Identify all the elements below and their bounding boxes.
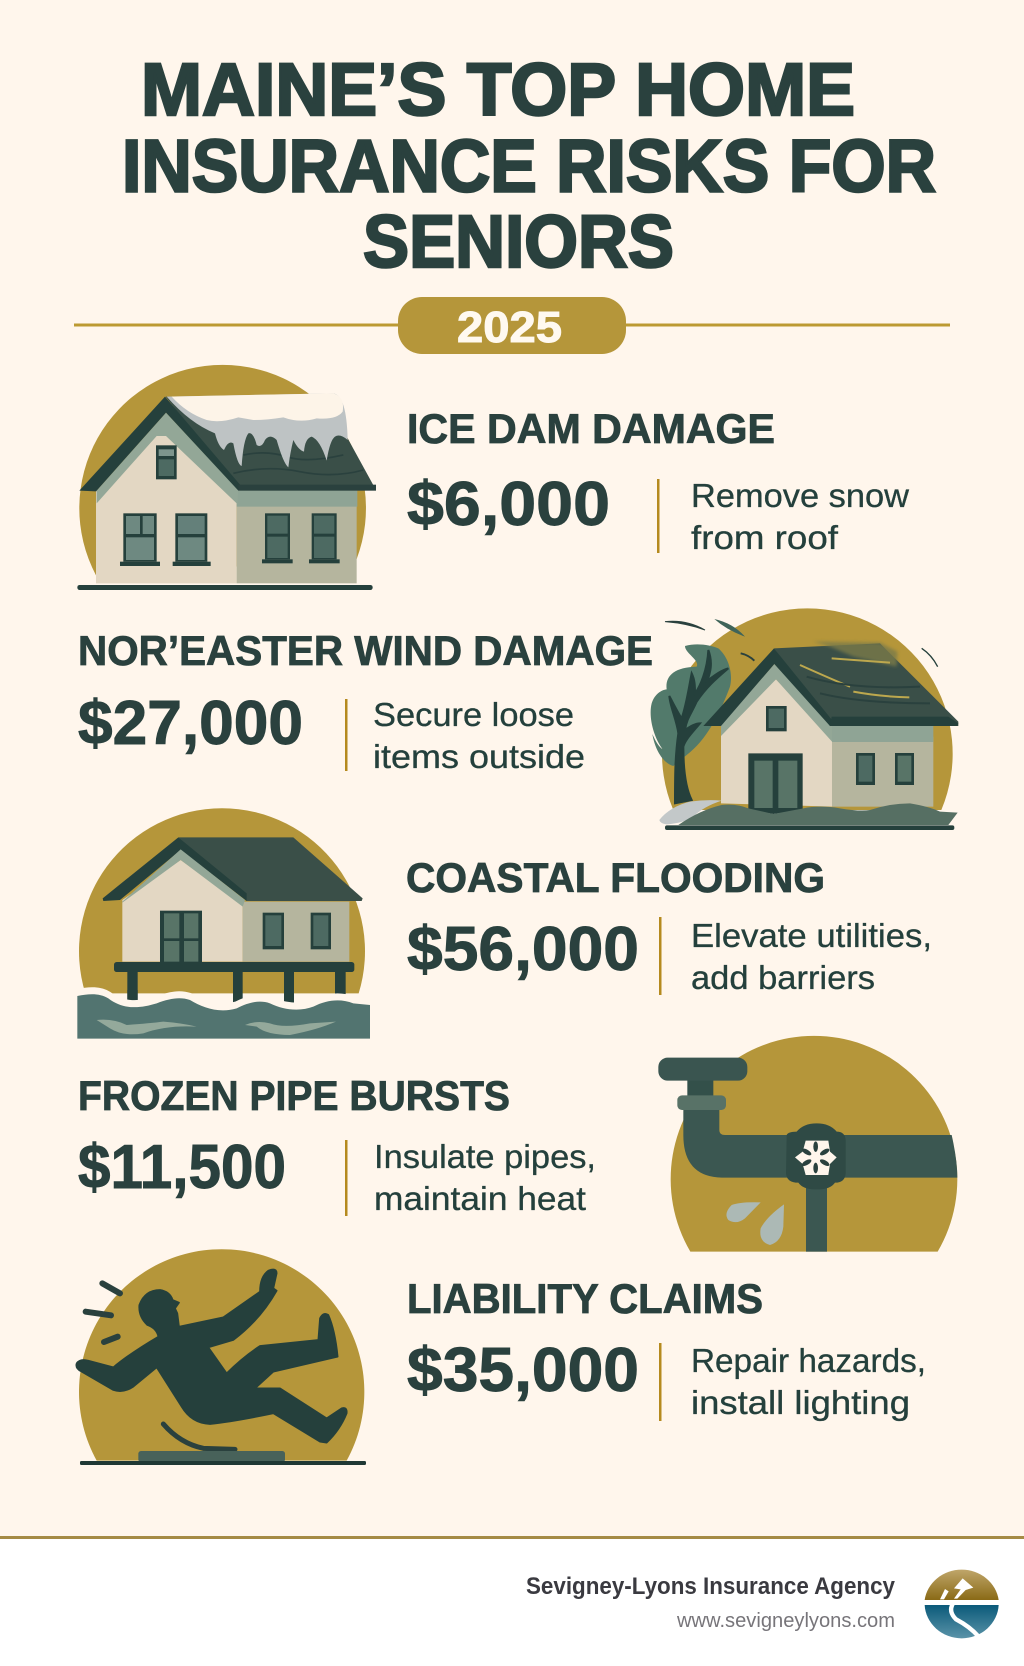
cost: $11,500: $11,500 — [78, 1133, 286, 1202]
heading: ice dam damage: ICE DAM DAMAGE — [407, 405, 775, 452]
title: MAINE’S TOP HOME — [141, 48, 855, 131]
icon: agency logo — [925, 1570, 999, 1638]
year badge with rule: 2025 — [457, 303, 562, 352]
title: INSURANCE RISKS FOR — [122, 124, 936, 208]
heading: coastal flooding: COASTAL FLOODING — [406, 854, 825, 901]
tip: insulate pipes: maintain heat — [374, 1180, 586, 1217]
agency name: Sevigney-Lyons Insurance Agency — [526, 1573, 896, 1600]
heading: frozen pipe bursts: FROZEN PIPE BURSTS — [78, 1072, 510, 1119]
tip: repair hazards: Repair hazards, — [691, 1342, 926, 1379]
panel: nor'easter wind damage — [78, 608, 958, 830]
tip: secure loose items — [373, 696, 585, 775]
year badge with rule — [74, 297, 950, 354]
cost: $56,000: $56,000 — [407, 915, 639, 984]
divider — [659, 917, 662, 995]
panel: frozen pipe bursts — [78, 1036, 957, 1252]
tip: elevate utilities: add barriers — [691, 959, 875, 996]
title — [122, 48, 936, 283]
tip: repair hazards: install lighting — [691, 1384, 910, 1421]
tip: elevate utilities — [691, 917, 932, 996]
cost: $35,000: $35,000 — [407, 1336, 639, 1405]
tip: elevate utilities: Elevate utilities, — [691, 917, 932, 954]
panel: coastal flooding — [77, 808, 932, 1039]
icon: house with snow and ice dam — [77, 365, 376, 590]
panel: liability claims — [76, 1249, 926, 1465]
icon: person slipping and falling — [76, 1249, 366, 1465]
agency website: www.sevigneylyons.com — [676, 1610, 895, 1632]
tip: insulate pipes: Insulate pipes, — [374, 1138, 596, 1175]
icon: house on stilts above flood water — [77, 808, 370, 1039]
tip: secure loose items: Secure loose — [373, 696, 574, 733]
tip: insulate pipes — [374, 1138, 596, 1217]
cost: $6,000: $6,000 — [407, 470, 610, 539]
divider — [657, 479, 660, 553]
tip: repair hazards — [691, 1342, 926, 1421]
icon: burst frozen pipe — [658, 1036, 957, 1252]
icon: house in wind with tree — [651, 608, 958, 830]
tip: remove snow — [691, 477, 909, 556]
tip: remove snow: Remove snow — [691, 477, 909, 514]
title: SENIORS — [363, 200, 674, 283]
divider — [659, 1343, 662, 1421]
divider — [345, 699, 348, 771]
panel: ice dam damage — [77, 365, 909, 590]
heading: liability claims: LIABILITY CLAIMS — [407, 1275, 763, 1322]
tip: secure loose items: items outside — [373, 738, 585, 775]
heading: nor'easter wind damage: NOR’EASTER WIND DAMAGE — [78, 627, 653, 674]
tip: remove snow: from roof — [691, 519, 839, 556]
footer — [0, 1536, 1024, 1666]
cost: $27,000: $27,000 — [78, 689, 303, 758]
divider — [345, 1140, 348, 1216]
